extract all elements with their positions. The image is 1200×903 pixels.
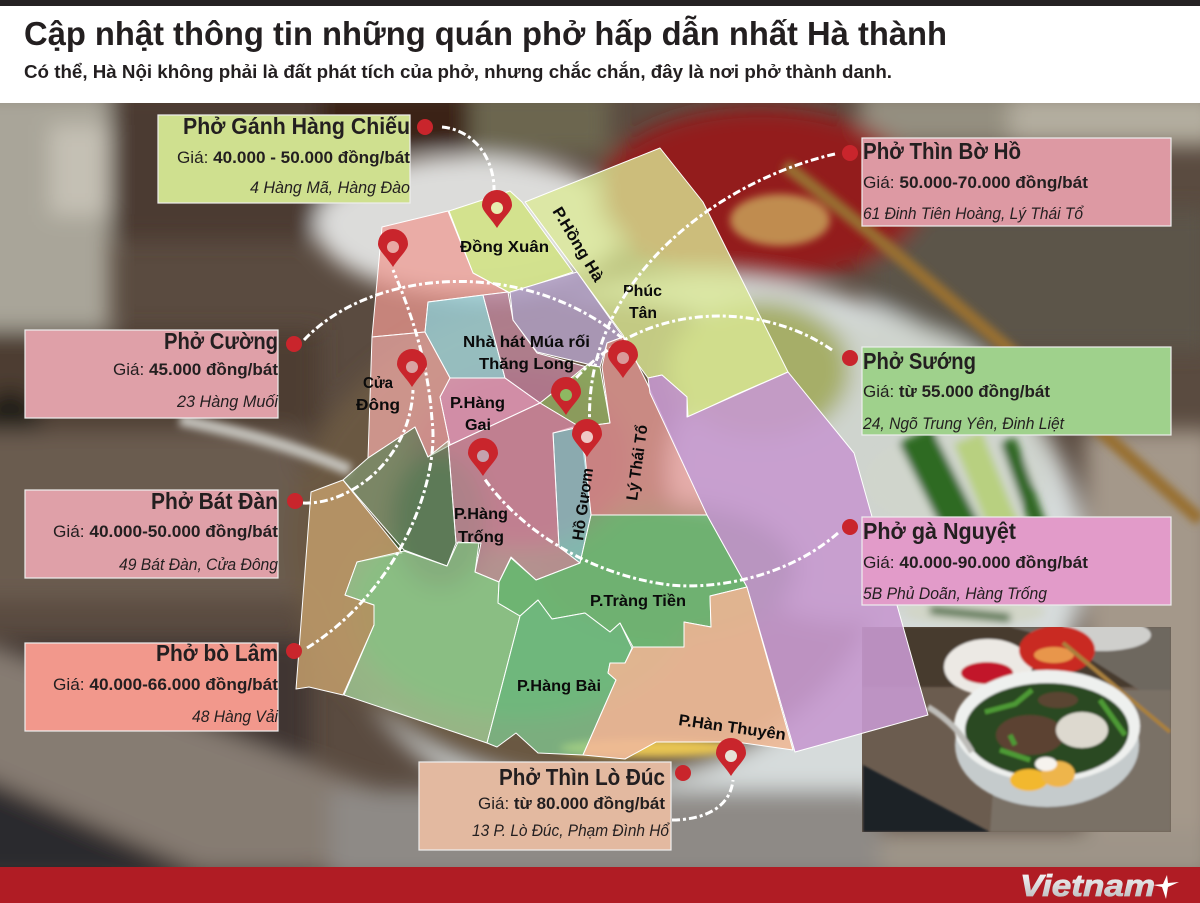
label: Nhà hát Múa rối Thăng Long: Nhà hát Múa rối bbox=[463, 334, 590, 351]
ward: Hàng Mã bbox=[372, 211, 508, 337]
ward: Hàng Gai bbox=[440, 378, 540, 445]
ward: brown bbox=[296, 480, 402, 695]
ward: Hàng Bông bbox=[343, 427, 456, 566]
label: P.Hàng Gai: P.Hàng bbox=[450, 395, 505, 412]
ward: Trần Hưng Đạo bbox=[344, 542, 520, 743]
heading: Phở Bát Đàn bbox=[151, 488, 278, 514]
address: 23 Hàng Muối bbox=[176, 393, 279, 411]
address: 61 Đinh Tiên Hoàng, Lý Thái Tổ bbox=[863, 205, 1084, 223]
ward: lavender bbox=[510, 272, 623, 367]
price: Giá: 40.000-50.000 đồng/bát bbox=[53, 523, 279, 541]
subtitle: Có thể, Hà Nội không phải là đất phát tích của phở, nhưng chắc chắn, đây là nơi phở thành danh. bbox=[24, 61, 892, 82]
price: Giá: từ 55.000 đồng/bát bbox=[863, 383, 1051, 401]
pin: Phở Cường bbox=[608, 340, 638, 378]
map labels bbox=[356, 204, 787, 744]
dot: Phở gà Nguyệt bbox=[842, 519, 858, 535]
logo: Vietnam+: Vietnam bbox=[1020, 868, 1155, 903]
pin: Phở Bát Đàn bbox=[397, 349, 427, 387]
dot: Phở Cường bbox=[286, 336, 302, 352]
ward: Hồ Gươm bbox=[553, 427, 591, 563]
address: 5B Phủ Doãn, Hàng Trống bbox=[863, 585, 1048, 603]
address: 49 Bát Đàn, Cửa Đông bbox=[119, 556, 279, 574]
heading: Phở gà Nguyệt bbox=[863, 518, 1016, 544]
dot: Phở Thìn Bờ Hồ bbox=[842, 145, 858, 161]
label: P.Hàng Trống: Trống bbox=[458, 529, 504, 546]
dot: Phở bò Lâm bbox=[286, 643, 302, 659]
header band bbox=[0, 0, 1200, 103]
heading: Phở bò Lâm bbox=[156, 640, 278, 666]
address: 13 P. Lò Đúc, Phạm Đình Hổ bbox=[472, 822, 670, 840]
heading: Phở Thìn Lò Đúc bbox=[499, 764, 665, 790]
ward: Tràng Tiền bbox=[498, 515, 747, 647]
panel: Phở Gánh Hàng Chiếu bbox=[158, 113, 411, 203]
dot: Phở Sướng bbox=[842, 350, 858, 366]
price: Giá: 40.000-90.000 đồng/bát bbox=[863, 554, 1089, 572]
heading: Phở Gánh Hàng Chiếu bbox=[183, 113, 410, 139]
label: P.Hàng Bài: P.Hàng Bài bbox=[517, 678, 601, 695]
ward: Hàng Bồ bbox=[425, 295, 505, 378]
heading: Phở Cường bbox=[164, 328, 278, 354]
panel: Phở gà Nguyệt bbox=[862, 517, 1171, 605]
dot: Phở Gánh Hàng Chiếu bbox=[417, 119, 433, 135]
pin: Phở Thìn Bờ Hồ bbox=[572, 419, 602, 457]
ward: Hàng Trống bbox=[448, 403, 580, 582]
ward: Hàng Đào green bbox=[540, 365, 610, 427]
label: P.Hồng Hà: P.Hồng Hà bbox=[549, 204, 606, 285]
price: Giá: 40.000 - 50.000 đồng/bát bbox=[177, 149, 411, 167]
ward: Lý Thái Tổ bbox=[580, 337, 707, 515]
pin: Phở Sướng bbox=[551, 377, 581, 415]
label: Cửa Đông: Đông bbox=[356, 397, 400, 414]
label: P.Hàn Thuyên: P.Hàn Thuyên bbox=[677, 712, 787, 744]
pin: Phở Thìn Lò Đúc bbox=[716, 738, 746, 776]
label: Lý Thái Tổ: Lý Thái Tổ bbox=[623, 424, 652, 502]
ward: Cửa Đông bbox=[368, 332, 450, 458]
panel: Phở Thìn Bờ Hồ bbox=[862, 138, 1171, 226]
label: Phúc Tân: Tân bbox=[629, 305, 657, 322]
address: 4 Hàng Mã, Hàng Đào bbox=[250, 179, 410, 197]
panel: Phở Bát Đàn bbox=[25, 488, 279, 578]
price: Giá: 50.000-70.000 đồng/bát bbox=[863, 174, 1089, 192]
ward: Hàn Thuyên bbox=[583, 587, 793, 759]
label: Nhà hát Múa rối Thăng Long: Thăng Long bbox=[479, 356, 574, 373]
label: P.Hàng Gai: Gai bbox=[465, 417, 491, 434]
heading: Phở Sướng bbox=[863, 348, 976, 374]
panel: Phở bò Lâm bbox=[25, 640, 279, 731]
price: Giá: 45.000 đồng/bát bbox=[113, 361, 279, 379]
label: Cửa Đông: Cửa bbox=[363, 375, 393, 392]
ward: Phúc Tân bbox=[525, 148, 788, 417]
panel: Phở Cường bbox=[25, 328, 279, 418]
panel: Phở Thìn Lò Đúc bbox=[419, 762, 671, 850]
ward: Hàng Buồm bbox=[483, 292, 587, 403]
pin: Phở gà Nguyệt bbox=[468, 438, 498, 476]
ward: Hàng Bài bbox=[487, 600, 632, 755]
address: 48 Hàng Vải bbox=[192, 708, 279, 726]
price: Giá: từ 80.000 đồng/bát bbox=[478, 795, 666, 813]
title: Cập nhật thông tin những quán phở hấp dẫn nhất Hà thành bbox=[24, 15, 947, 52]
pin: Phở Gánh Hàng Chiếu bbox=[482, 190, 512, 228]
pin: Phở Bò Lâm bbox=[378, 229, 408, 267]
inset photo: bowl of pho with egg bbox=[862, 619, 1171, 832]
dot: Phở Bát Đàn bbox=[287, 493, 303, 509]
label: P.Tràng Tiền: P.Tràng Tiền bbox=[590, 593, 686, 610]
label: Đồng Xuân: Đồng Xuân bbox=[460, 239, 549, 256]
footer band bbox=[0, 867, 1200, 903]
ward: Đồng Xuân bbox=[449, 191, 573, 293]
ward: Nguyễn Du purple bbox=[648, 372, 928, 752]
address: 24, Ngõ Trung Yên, Đinh Liệt bbox=[862, 415, 1065, 433]
map of Hoan Kiem wards bbox=[296, 148, 928, 759]
panel: Phở Sướng bbox=[862, 347, 1171, 435]
price: Giá: 40.000-66.000 đồng/bát bbox=[53, 676, 279, 694]
label: Hồ Gươm: Hồ Gươm bbox=[570, 467, 597, 542]
dot: Phở Thìn Lò Đúc bbox=[675, 765, 691, 781]
label: Phúc Tân: Phúc bbox=[623, 283, 662, 300]
dotted connector lines bbox=[303, 127, 838, 820]
heading: Phở Thìn Bờ Hồ bbox=[863, 138, 1021, 164]
label: P.Hàng Trống: P.Hàng bbox=[454, 506, 508, 523]
